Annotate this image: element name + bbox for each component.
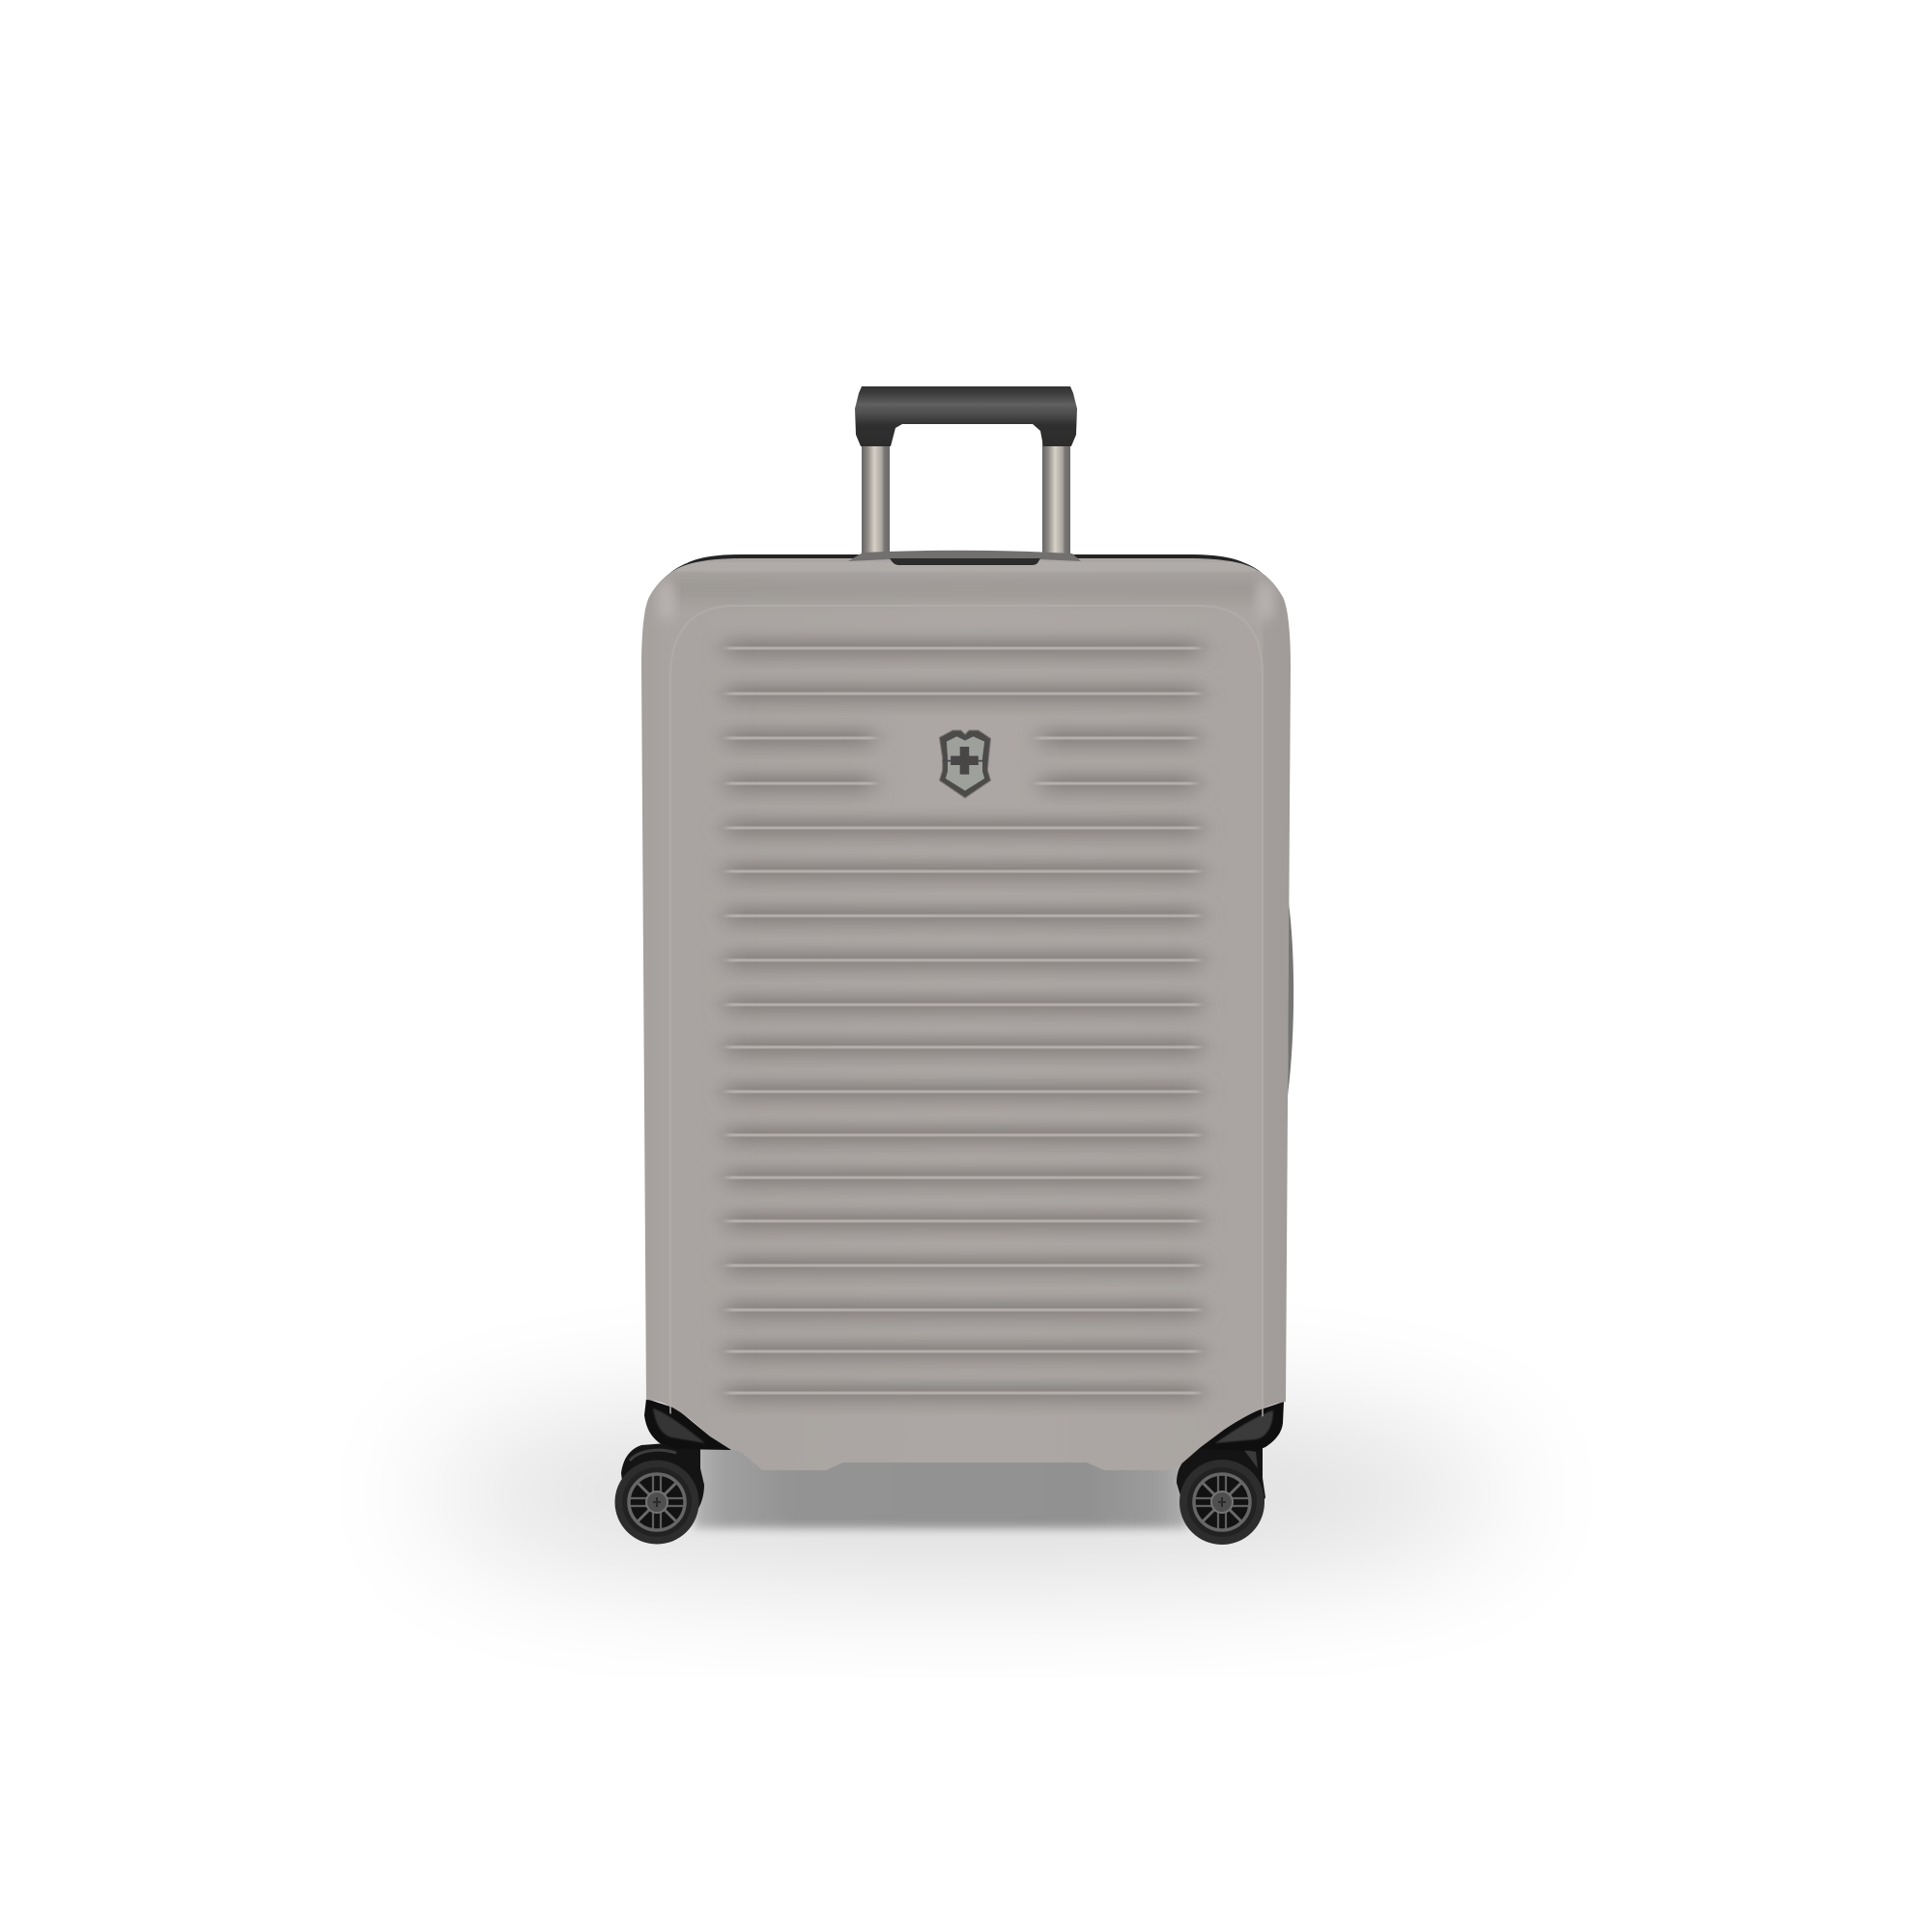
telescopic handle <box>855 386 1077 555</box>
bottom corner guards <box>644 1399 1284 1451</box>
right corner guard <box>1198 1402 1284 1451</box>
brand shield logo <box>939 730 991 798</box>
shield cross <box>951 747 979 775</box>
top band highlight <box>676 562 1256 570</box>
shoulder highlights <box>658 580 675 622</box>
left caster fork <box>621 1443 704 1526</box>
floor shadow: dark area under the case <box>694 1430 1188 1528</box>
right pole <box>1042 440 1070 555</box>
floor shadow: wide soft glow <box>425 1410 1507 1575</box>
right wheel tire <box>1179 1460 1264 1545</box>
zipper edge <box>651 554 1281 597</box>
left wheel tire <box>614 1461 699 1544</box>
product illustration: suitcase <box>441 386 1491 1623</box>
right wheel rim <box>1193 1473 1251 1531</box>
left corner guard <box>644 1399 731 1450</box>
recessed front panel outline <box>670 606 1263 1449</box>
top carry handle <box>848 551 1081 565</box>
left wheel rim <box>628 1473 686 1531</box>
case body <box>641 558 1291 1470</box>
handle grip <box>855 386 1077 446</box>
horizontal ribs <box>726 625 1200 1416</box>
left wheel assembly <box>614 1443 704 1544</box>
right caster fork <box>1177 1447 1265 1526</box>
right wheel assembly <box>1177 1447 1265 1545</box>
side latch <box>1288 902 1293 1095</box>
shield bar <box>943 760 987 761</box>
left pole <box>862 440 890 555</box>
